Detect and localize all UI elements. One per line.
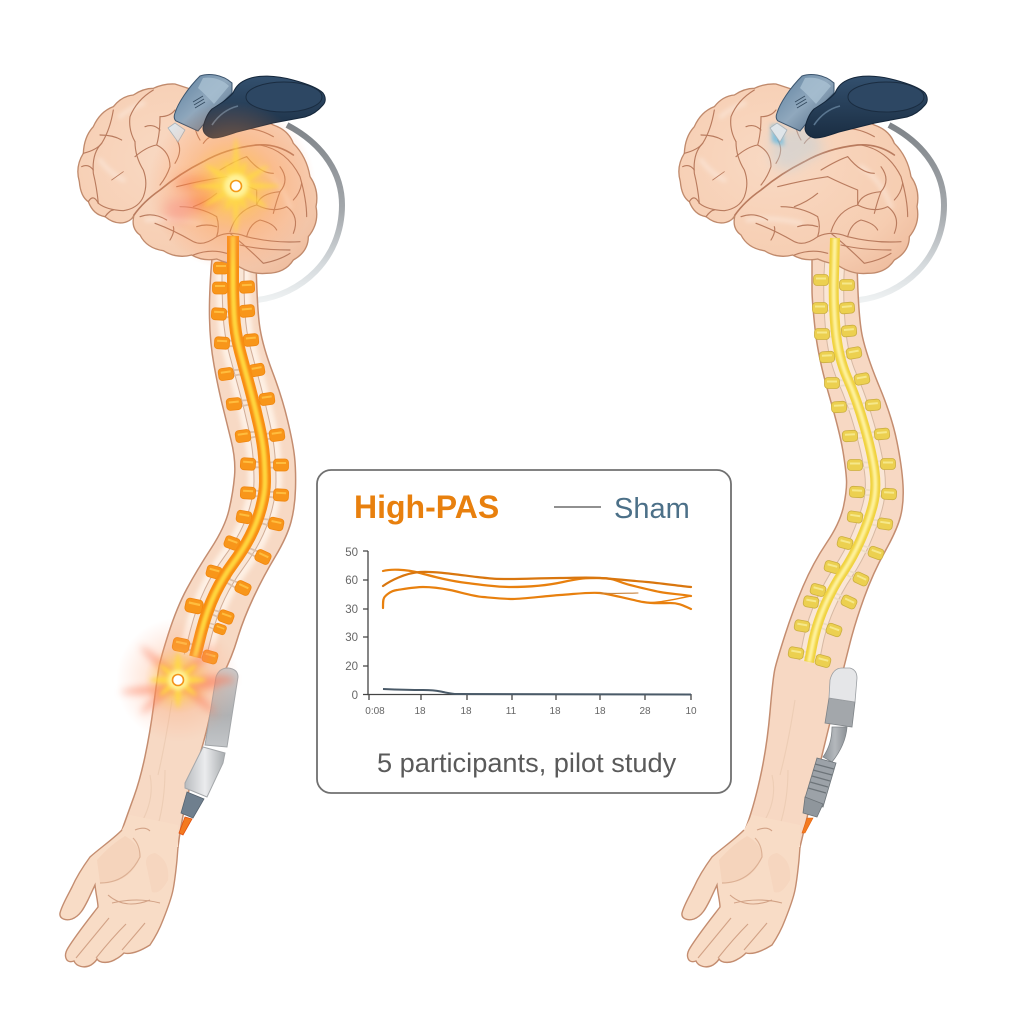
spinal sheath <box>195 258 265 657</box>
arm activation burst <box>116 618 240 742</box>
caption: 5 participants, pilot study <box>377 747 677 778</box>
hand <box>60 815 178 967</box>
High-PAS lines <box>383 570 691 609</box>
brain <box>679 84 918 274</box>
spinal cord yellow <box>809 238 875 662</box>
y axis labels: 30 <box>345 632 358 644</box>
y axis labels: 30 <box>345 604 358 616</box>
y axis labels <box>345 547 358 702</box>
chart axes <box>363 551 691 700</box>
vertebrae tabs <box>788 274 897 668</box>
x axis labels: 11 <box>506 706 517 717</box>
arm and torso tube <box>122 258 296 847</box>
x axis labels: 18 <box>549 706 561 717</box>
legend: Sham: Sham <box>614 493 690 525</box>
cable <box>257 125 342 300</box>
spinal cord glowing orange <box>195 236 265 657</box>
coil device on head <box>770 74 927 142</box>
x axis labels: 18 <box>414 706 426 717</box>
x axis labels: 28 <box>639 706 651 717</box>
y axis labels: 0 <box>352 690 358 702</box>
y axis labels: 50 <box>345 547 358 559</box>
spinal sheath <box>809 258 875 662</box>
cable <box>859 125 944 300</box>
forearm stimulation probe <box>802 668 857 833</box>
figure: Sham pathway (right) <box>679 74 944 967</box>
hand <box>682 815 800 967</box>
brain activation burst <box>148 102 316 270</box>
legend: Sham line <box>554 506 601 508</box>
faint blue stimulation field <box>770 124 825 172</box>
x axis labels: 18 <box>460 706 472 717</box>
legend: High-PAS: High-PAS <box>354 489 499 525</box>
x axis labels: 0:08 <box>365 706 385 717</box>
vertebrae tabs <box>172 262 289 665</box>
forearm stimulation probe <box>179 668 238 835</box>
coil device on head <box>168 74 325 142</box>
panel: results chart <box>317 470 731 793</box>
arm and torso tube <box>745 258 903 847</box>
x axis labels: 10 <box>685 706 697 717</box>
y axis labels: 60 <box>345 575 358 587</box>
figure: High-PAS active pathway (left) <box>60 74 342 967</box>
y axis labels: 20 <box>345 661 358 673</box>
x axis labels <box>365 706 697 717</box>
x axis labels: 18 <box>594 706 606 717</box>
brain <box>78 84 317 274</box>
Sham line <box>383 689 691 694</box>
